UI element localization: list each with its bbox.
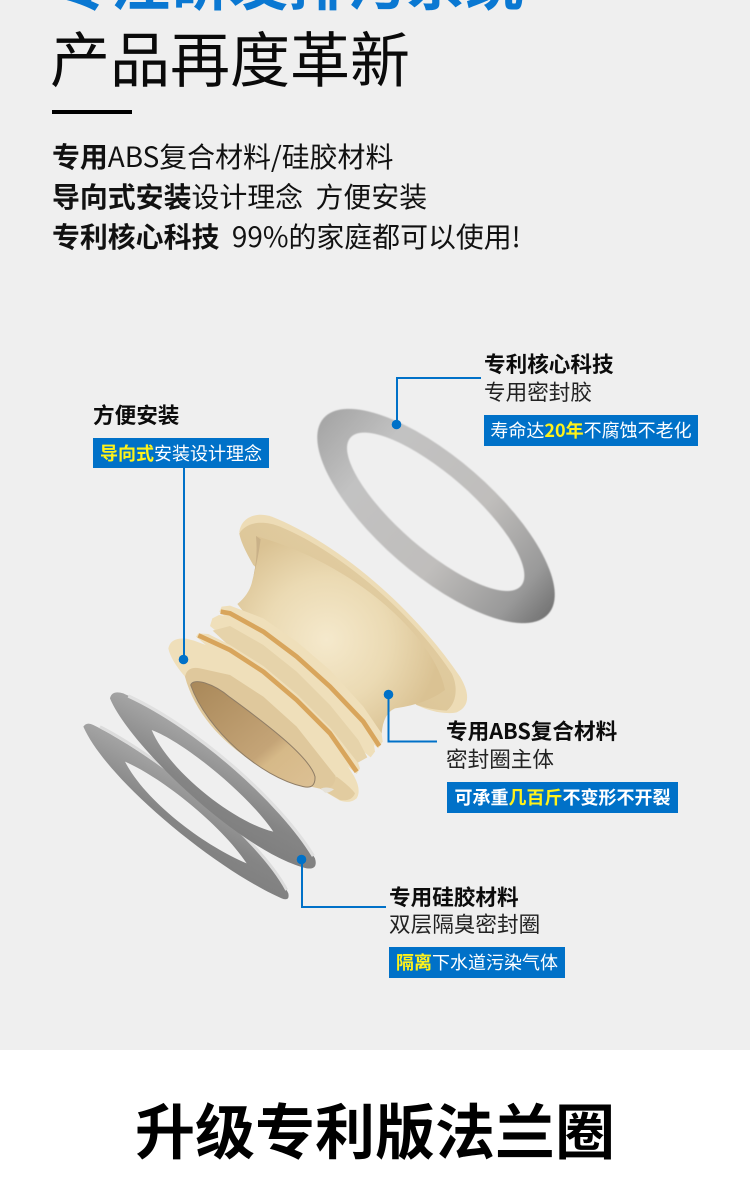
callout heading: 专用硅胶材料: [389, 881, 519, 912]
callout line: guide install: [179, 468, 188, 664]
title: 产品再度革新: [50, 13, 410, 100]
bottom section: [0, 1050, 750, 1200]
notch highlight: [321, 787, 334, 793]
gasket upper: [110, 692, 316, 869]
callout tag: 可承重几百斤不变形不开裂: [454, 784, 670, 810]
gasket lower edge highlight: [100, 727, 287, 890]
middle thread ring: [210, 615, 375, 757]
middle ring lower face: [213, 626, 367, 763]
feature line 1: 专用ABS复合材料/硅胶材料: [52, 136, 393, 176]
callout tag: 寿命达20年不腐蚀不老化: [490, 417, 692, 443]
callout tag: 隔离下水道污染气体: [396, 949, 558, 975]
callout subheading: 双层隔臭密封圈: [389, 908, 540, 939]
neck shadow edge: [252, 536, 261, 583]
feature line 3: 专利核心科技 99%的家庭都可以使用!: [52, 216, 521, 256]
ABS flange body: [168, 515, 467, 802]
top rim: [239, 515, 467, 713]
silicone gaskets: [83, 692, 316, 899]
callout subheading: 密封圈主体: [446, 743, 554, 774]
callout: patented sealant: [484, 348, 698, 446]
flared neck: [237, 536, 445, 753]
bottom flange: [168, 639, 359, 802]
gasket upper edge highlight: [128, 696, 313, 856]
callout line: ABS body: [384, 690, 437, 742]
callout: easy install: [93, 399, 269, 468]
silicone sealing ring: [285, 374, 587, 658]
flange collar: [185, 668, 336, 789]
upper thread ring: [219, 606, 383, 748]
callout subheading: 专用密封胶: [484, 376, 592, 407]
callout line: gaskets: [297, 855, 386, 907]
callout heading: 方便安装: [93, 399, 179, 430]
lower thread ring: [196, 633, 360, 774]
groove 2: [198, 635, 357, 772]
callout tag: 导向式安装设计理念: [100, 440, 262, 466]
callout: ABS material: [446, 715, 678, 813]
callout: silicone material: [389, 881, 565, 978]
title underline: [52, 110, 132, 114]
section heading: 升级专利版法兰圈: [135, 1085, 615, 1172]
callout line: sealing ring: [392, 378, 481, 429]
bottom opening: [191, 682, 315, 787]
flange edge shadow: [320, 777, 355, 800]
rim inner face: [239, 523, 456, 711]
groove 1: [221, 612, 379, 746]
callout heading: 专利核心科技: [484, 348, 614, 379]
feature text block: [52, 136, 521, 256]
callout heading: 专用ABS复合材料: [446, 715, 617, 746]
gasket lower: [83, 724, 289, 899]
feature line 2: 导向式安装设计理念 方便安装: [52, 176, 427, 216]
